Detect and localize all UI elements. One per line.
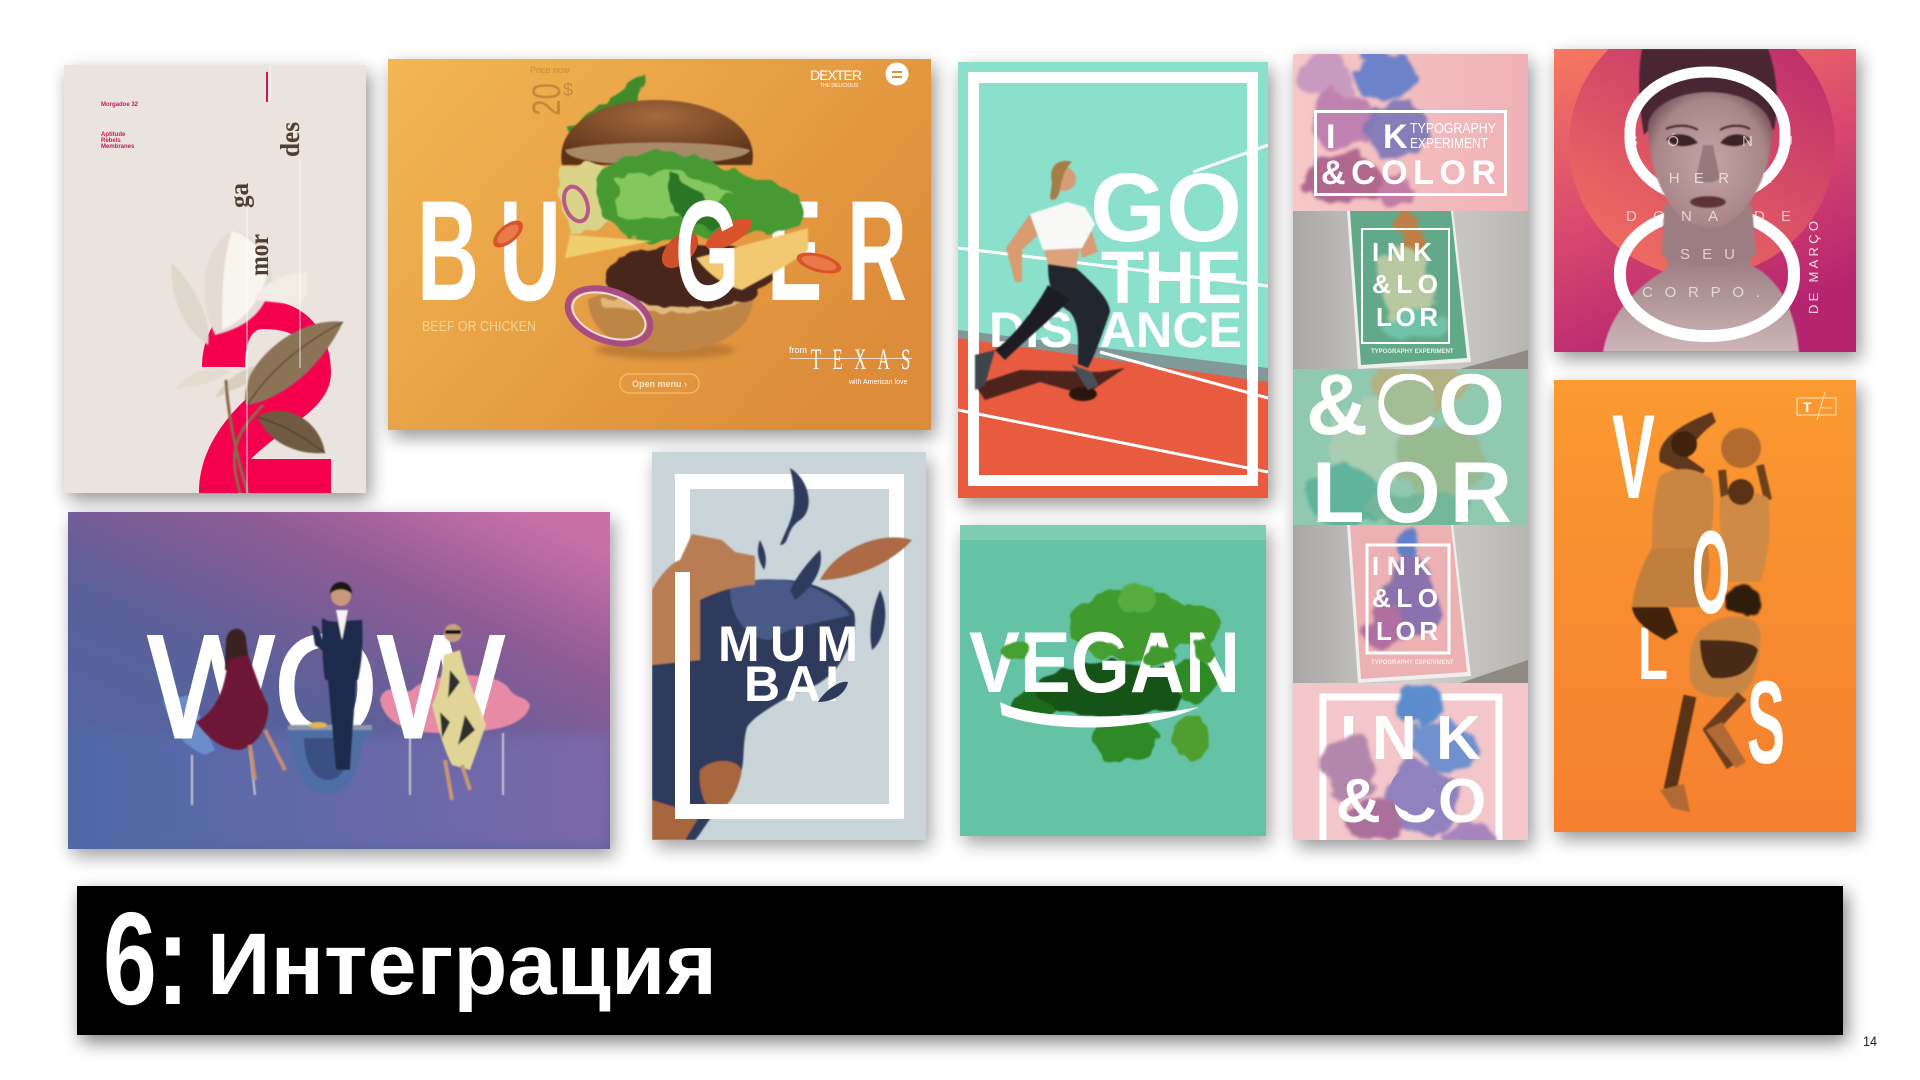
ink tile 4 pink mockup: TYPOGRAPHY EXPERIMENT — [1371, 660, 1454, 666]
pink small captions: Aptitude — [101, 132, 126, 138]
lettuce — [597, 152, 805, 241]
overlaid poem letters: DONA DE — [1626, 208, 1791, 225]
BURGER back letters: R — [847, 170, 907, 331]
ink tile 2 green mockup: &LO — [1372, 269, 1438, 299]
BURGER back letters: B — [417, 170, 479, 330]
BURGER back letters: E — [767, 170, 822, 331]
red number 2 — [199, 300, 331, 493]
pink small captions: Membranes — [101, 144, 135, 150]
brand and menu icon: DEXTER — [810, 67, 862, 83]
ink tile 5 pale pink: O — [1438, 767, 1486, 836]
ink tile 5 pale pink — [1293, 683, 1528, 857]
ink tile 5 pale pink: N — [1372, 704, 1417, 773]
overlaid poem letters: SÓ NU — [1628, 133, 1793, 150]
G letter in front of burger: G — [675, 170, 740, 331]
panel: basketball poster: S — [1747, 657, 1785, 789]
lane lines — [958, 145, 1268, 472]
ink tile 4 pink mockup — [1293, 523, 1528, 683]
ink tile 1 pink: EXPERIMENT — [1410, 135, 1488, 152]
ink tile 2 green mockup: INK — [1372, 237, 1432, 267]
ink tile 5 pale pink: K — [1436, 704, 1481, 773]
panel: vegan poster — [960, 525, 1270, 843]
panel: ink and color column — [1293, 51, 1532, 857]
panel: burger poster: THE DELICIOUS — [820, 83, 859, 89]
ink tile 1 pink: TYPOGRAPHY — [1410, 120, 1496, 137]
rotated serif words: ga — [224, 183, 254, 208]
letters V and L: L — [1638, 612, 1668, 695]
panel: basketball poster: T — [1803, 399, 1812, 415]
headline — [992, 173, 1240, 348]
letters V and L: V — [1612, 390, 1655, 524]
subtitle: BEEF OR CHICKEN — [422, 318, 536, 335]
green leaves — [1013, 584, 1221, 762]
panel: flower poster with number 2 — [64, 65, 370, 500]
panel: Mumbai poster — [652, 452, 930, 847]
circle — [1569, 11, 1835, 277]
ink tile 4 pink mockup: INK — [1372, 551, 1432, 581]
ink tile 3 teal: C — [1375, 357, 1437, 453]
ink tile 3 teal: & — [1306, 357, 1368, 453]
vertical pink tick — [266, 72, 268, 102]
ink tile 4 pink mockup: &LO — [1372, 583, 1438, 613]
panel: Go the distance poster — [958, 62, 1272, 505]
ink tile 1 pink: K — [1383, 118, 1408, 156]
white frame — [974, 78, 1252, 480]
overlaid poem letters: CORPO. — [1642, 284, 1760, 301]
MUMBAI headline — [721, 626, 855, 701]
letters V and L — [1612, 390, 1668, 695]
overlaid poem letters: LHER É — [1646, 170, 1772, 187]
seated women in front of the letters — [196, 624, 486, 800]
overlaid poem letters — [1626, 133, 1793, 301]
ink over hidden letter — [1384, 380, 1436, 424]
BURGER back letters — [422, 202, 906, 302]
patty — [606, 244, 774, 308]
burger illustration — [488, 74, 844, 359]
panel: number 8 portrait poster — [1554, 11, 1860, 359]
runner — [975, 161, 1125, 401]
headline: GO — [1090, 153, 1242, 262]
vertical date caption: DE MARÇO — [1806, 221, 1821, 314]
ink tile 2 green mockup: LOR — [1376, 302, 1438, 332]
WOW headline: WOW — [148, 605, 504, 768]
headline: THE — [1101, 236, 1242, 319]
headline: DISTANCE — [989, 302, 1242, 358]
ink tile 2 green mockup — [1293, 211, 1528, 369]
ink tile 5 pale pink: C — [1392, 767, 1437, 836]
giant outlined 8 — [1630, 72, 1785, 199]
TEXAS lockup — [789, 346, 912, 384]
section number: 6: — [103, 885, 189, 1032]
title bar — [77, 885, 1847, 1042]
logo — [1797, 398, 1836, 415]
TEXAS lockup: TEXAS — [811, 343, 922, 376]
sprig on top — [568, 74, 642, 139]
woman hair and shoulders — [1603, 49, 1799, 352]
rotated serif words: des — [275, 122, 305, 157]
ink tile 2 green mockup: TYPOGRAPHY EXPERIMENT — [1371, 349, 1454, 355]
BURGER back letters: U — [499, 170, 561, 330]
TEXAS lockup: from — [789, 345, 807, 355]
panel: WOW poster — [68, 512, 614, 856]
pink small captions: Morgadoe 32 — [101, 102, 139, 108]
woman face in front of the 8 waist — [1648, 92, 1772, 266]
ink tile 5 pale pink: I — [1340, 704, 1357, 773]
price: $ — [563, 80, 573, 100]
panel: basketball poster — [1554, 380, 1860, 839]
MUMBAI headline: MUM — [718, 616, 858, 672]
ink tile 1 pink — [1293, 51, 1528, 211]
jumping players — [1632, 412, 1770, 640]
white swoosh — [1000, 702, 1199, 727]
rotated serif words: mor — [244, 234, 274, 276]
panel: basketball poster: O — [1692, 507, 1730, 639]
overlaid poem letters: SEU — [1680, 246, 1735, 263]
ink tile 3 teal: LOR — [1312, 445, 1512, 541]
ink tile 5 pale pink: & — [1336, 767, 1381, 836]
ink tile 3 teal: O — [1438, 357, 1505, 453]
track and fence — [958, 330, 1268, 385]
ink tile 1 pink: &COLOR — [1321, 154, 1496, 192]
crouching player — [1660, 584, 1760, 812]
cheese — [565, 235, 652, 258]
open menu button — [620, 374, 699, 393]
panel: burger poster: Open menu › — [632, 379, 687, 389]
section title: Интеграция — [207, 916, 717, 1013]
price: 20 — [525, 83, 569, 116]
thin white lines — [247, 65, 300, 493]
pink small captions — [101, 102, 139, 150]
TEXAS lockup: with American love — [848, 379, 907, 386]
chairs and sofa — [163, 675, 530, 805]
price: Price now — [530, 65, 570, 75]
torn leaf figure — [652, 468, 912, 840]
leaves overlapping text — [1004, 638, 1215, 666]
rotated serif words — [234, 122, 300, 276]
left frame edge in front of figure — [675, 572, 690, 819]
bottom bun — [588, 288, 753, 352]
top bun — [561, 100, 753, 165]
white frame — [682, 482, 896, 812]
ink over hidden letter — [1390, 768, 1434, 812]
MUMBAI headline: BAI — [744, 656, 839, 712]
ink tile 3 teal — [1293, 357, 1528, 541]
man and U table — [288, 582, 372, 794]
page number: 14 — [1863, 1033, 1877, 1049]
panel: burger poster — [388, 59, 935, 437]
flower petals and leaves — [171, 231, 343, 493]
VEGAN headline: VEGAN — [969, 615, 1240, 711]
pink small captions: Rebels — [101, 138, 121, 144]
ink tile 1 pink: I — [1326, 118, 1335, 156]
pale under-lettuce — [559, 165, 615, 235]
onion rings and tomato slices — [562, 184, 590, 224]
ink tile 4 pink mockup: LOR — [1376, 616, 1438, 646]
